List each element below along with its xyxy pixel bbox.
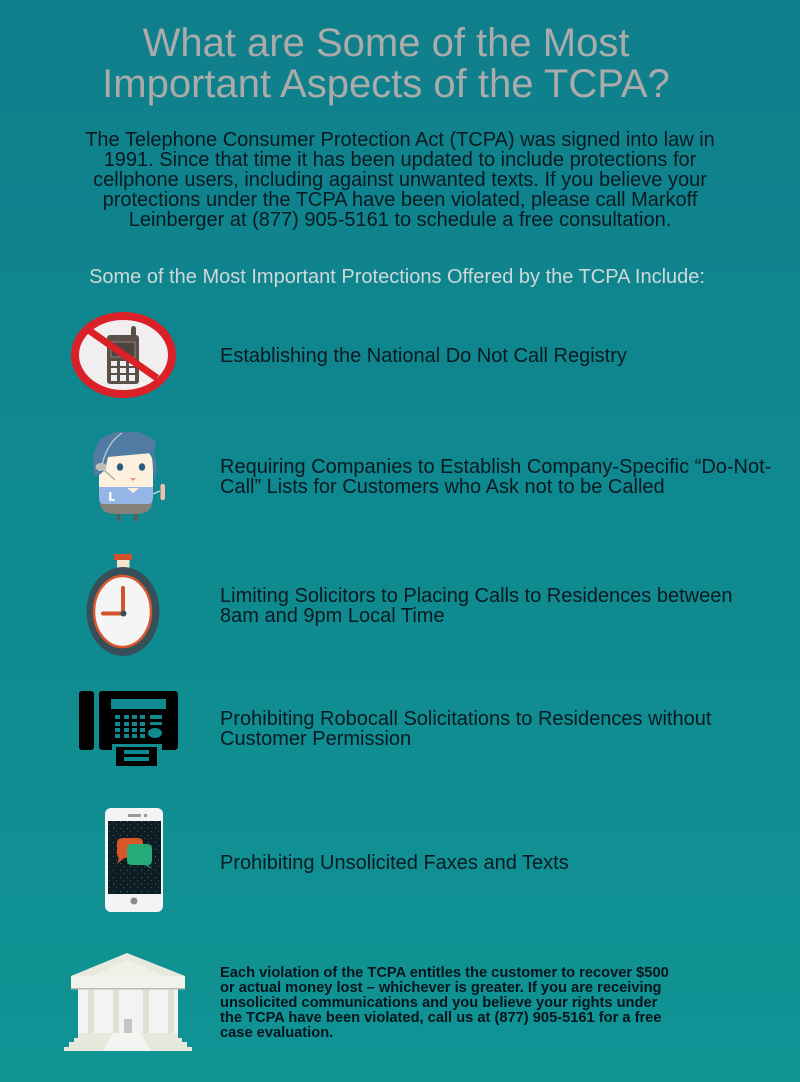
item text: calling hours: 8am and 9pm Local Time [220, 605, 445, 627]
item text: calling hours: Limiting Solicitors to Placing Calls to Residences between [220, 585, 732, 607]
intro paragraph: 1991. Since that time it has been updated to include protections for [104, 149, 696, 171]
item text: do not call registry: Establishing the National Do Not Call Registry [220, 345, 627, 367]
intro paragraph: The Telephone Consumer Protection Act (TCPA) was signed into law in [85, 129, 715, 151]
item text: calling hours [220, 585, 732, 627]
intro paragraph: Leinberger at (877) 905-5161 to schedule a free consultation. [129, 209, 671, 231]
icon: fax machine [79, 691, 178, 766]
title [102, 21, 670, 106]
closing note: unsolicited communications and you believe your rights under [220, 995, 657, 1011]
title: Important Aspects of the TCPA? [102, 62, 670, 106]
title: What are Some of the Most [143, 21, 629, 65]
icon: call center agent [93, 432, 165, 521]
item text: company lists [220, 456, 771, 498]
closing note: the TCPA have been violated, call us at (877) 905-5161 for a free [220, 1010, 662, 1026]
intro paragraph: protections under the TCPA have been violated, please call Markoff [103, 189, 697, 211]
icon: stopwatch clock [86, 554, 160, 656]
item text: robocalls: Prohibiting Robocall Solicitations to Residences without [220, 708, 711, 730]
closing note: or actual money lost – whichever is greater. If you are receiving [220, 980, 662, 996]
icon: courthouse [64, 953, 192, 1051]
closing note [220, 965, 669, 1041]
intro paragraph [85, 129, 715, 231]
item text: robocalls: Customer Permission [220, 728, 411, 750]
subheading: Some of the Most Important Protections Offered by the TCPA Include: [89, 266, 705, 288]
item text: company lists: Call” Lists for Customers who Ask not to be Called [220, 476, 665, 498]
icon: smartphone with chat bubbles [105, 808, 163, 912]
item text: company lists: Requiring Companies to Establish Company-Specific “Do-Not- [220, 456, 771, 478]
closing note: case evaluation. [220, 1025, 333, 1041]
item text: faxes and texts: Prohibiting Unsolicited Faxes and Texts [220, 852, 569, 874]
closing note: Each violation of the TCPA entitles the customer to recover $500 [220, 965, 669, 981]
intro paragraph: cellphone users, including against unwanted texts. If you believe your [93, 169, 707, 191]
item text: robocalls [220, 708, 712, 750]
icon: no phone [75, 316, 172, 394]
